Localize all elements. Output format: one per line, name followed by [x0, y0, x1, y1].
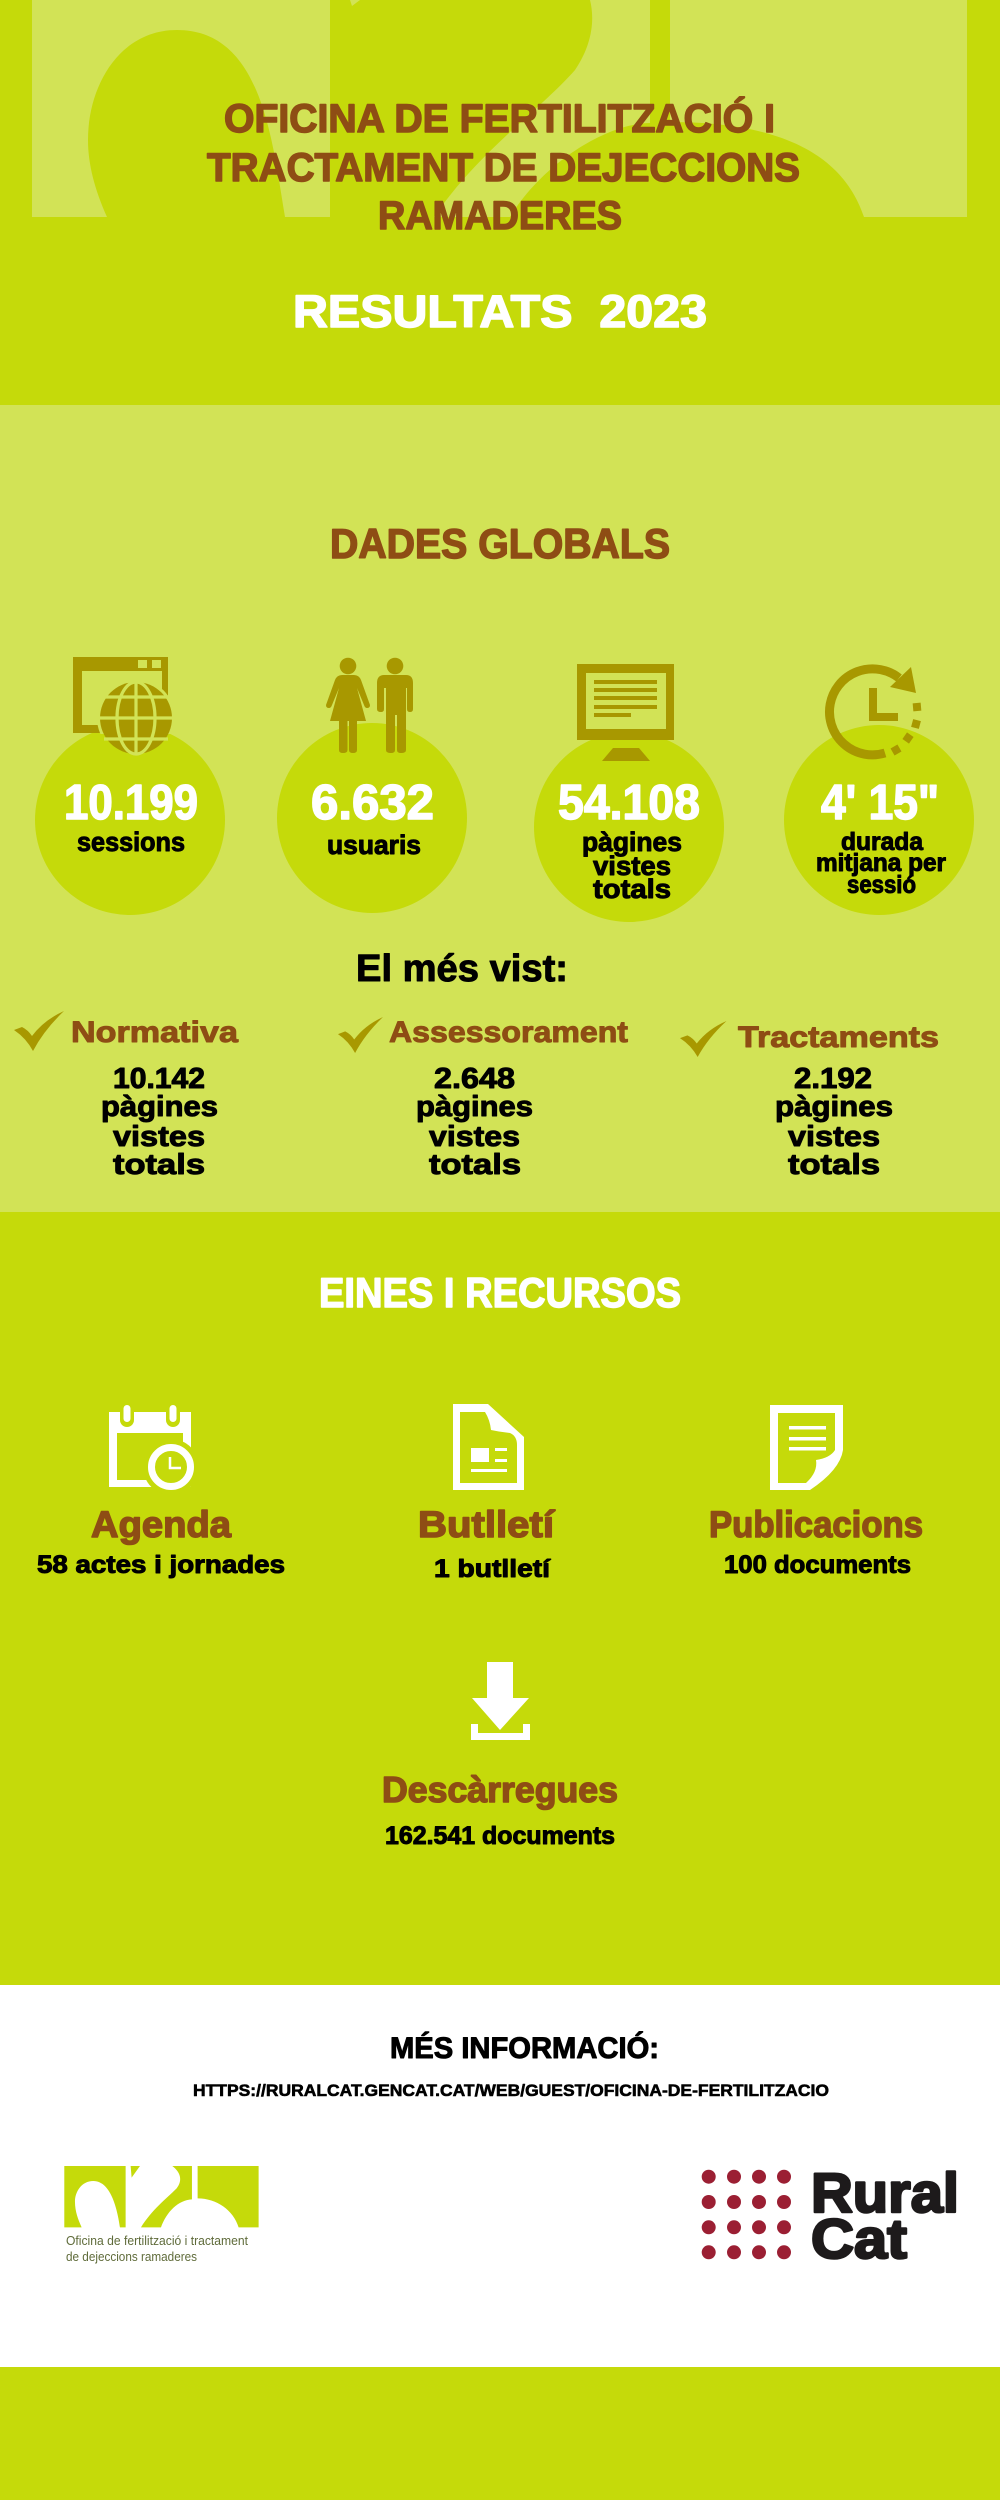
- panel: header: [0, 0, 1000, 405]
- title: OFICINA DE FERTILITZACIÓ I: [224, 95, 775, 141]
- icon: download arrow: [471, 1662, 530, 1740]
- logo: ruralcat: Cat: [811, 2207, 907, 2270]
- subtitle: resultats 2023: RESULTATS 2023: [293, 286, 707, 337]
- panel: dades globals: [0, 405, 1000, 1212]
- watermark logo: [32, 0, 967, 217]
- item: assessorament: vistes: [429, 1121, 520, 1153]
- item: agenda: Agenda: [91, 1504, 231, 1545]
- item: agenda: [37, 1403, 285, 1579]
- heading: mes informacio: MÉS INFORMACIÓ:: [390, 2031, 659, 2065]
- icon: newsletter page: [453, 1404, 524, 1490]
- item: tractaments: 2.192: [794, 1063, 872, 1095]
- stat: sessions: sessions: [77, 827, 185, 857]
- icon: clock with arrow: [829, 667, 921, 755]
- panel: mes informacio: [0, 1985, 1000, 2367]
- stat: pagines vistes: 54.108: [558, 776, 700, 830]
- panel: footer band: [0, 2367, 1000, 2500]
- icon: check: [338, 1017, 383, 1053]
- title: [207, 95, 800, 238]
- item: tractaments: vistes: [788, 1121, 880, 1153]
- item: assessorament: Assessorament: [389, 1016, 628, 1049]
- item: tractaments: totals: [788, 1149, 880, 1181]
- item: normativa: 10.142: [113, 1063, 205, 1095]
- stat: durada mitjana: 4' 15": [821, 776, 939, 830]
- item: agenda: 58 actes i jornades: [37, 1551, 285, 1579]
- item: tractaments: pàgines: [775, 1091, 893, 1123]
- stat: usuaris: [277, 658, 467, 913]
- item: publicacions: 100 documents: [724, 1551, 911, 1579]
- stat: durada mitjana: mitjana per: [816, 849, 946, 877]
- logo: oficina: Oficina de fertilització i tractament: [66, 2233, 248, 2248]
- stat: pagines vistes: totals: [593, 874, 671, 904]
- heading: dades globals: DADES GLOBALS: [330, 520, 670, 567]
- heading: eines i recursos: EINES I RECURSOS: [319, 1269, 681, 1316]
- stat: durada mitjana: durada: [841, 828, 924, 856]
- icon: monitor: [577, 664, 674, 761]
- stat: pagines vistes: pàgines: [582, 827, 682, 857]
- item: assessorament: pàgines: [416, 1091, 533, 1123]
- item: normativa: totals: [113, 1149, 205, 1181]
- item: descarregues: Descàrregues: [382, 1769, 618, 1810]
- item: butlleti: 1 butlletí: [434, 1555, 551, 1583]
- icon: check: [14, 1011, 64, 1051]
- item: normativa: pàgines: [101, 1091, 218, 1123]
- icon: people: [326, 658, 413, 753]
- logo: ruralcat: Rural: [811, 2161, 959, 2224]
- stat: sessions: 10.199: [64, 776, 198, 830]
- item: tractaments: [680, 1021, 939, 1181]
- item: assessorament: totals: [429, 1149, 521, 1181]
- icon: document: [770, 1405, 843, 1490]
- logo: oficina: de dejeccions ramaderes: [66, 2249, 197, 2264]
- item: butlleti: Butlletí: [418, 1504, 556, 1545]
- link url: HTTPS://RURALCAT.GENCAT.CAT/WEB/GUEST/OFICINA-DE-FERTILITZACIO: [193, 2081, 829, 2100]
- title: RAMADERES: [378, 194, 622, 238]
- item: publicacions: Publicacions: [709, 1504, 923, 1545]
- item: publicacions: [709, 1405, 923, 1579]
- item: normativa: [14, 1011, 238, 1181]
- item: tractaments: Tractaments: [738, 1021, 939, 1054]
- item: assessorament: [338, 1016, 628, 1181]
- stat: usuaris: 6.632: [311, 776, 434, 830]
- icon: check: [680, 1021, 726, 1057]
- stat: pagines vistes: [534, 664, 724, 922]
- item: normativa: Normativa: [71, 1016, 238, 1049]
- stat: pagines vistes: vistes: [593, 851, 671, 881]
- stat: durada mitjana: sessió: [847, 871, 916, 899]
- item: butlleti: [418, 1404, 556, 1583]
- stat: usuaris: usuaris: [327, 830, 421, 860]
- item: assessorament: 2.648: [434, 1063, 515, 1095]
- panel: eines i recursos: [0, 1212, 1000, 1985]
- icon: browser globe: [73, 657, 175, 757]
- stat: durada mitjana: [784, 667, 974, 915]
- item: normativa: vistes: [113, 1121, 205, 1153]
- item: descarregues: [382, 1662, 618, 1850]
- heading: el mes vist: El més vist:: [356, 948, 568, 990]
- logo: oficina: [64, 2166, 259, 2264]
- title: TRACTAMENT DE DEJECCIONS: [207, 146, 800, 190]
- logo: ruralcat: [702, 2161, 959, 2270]
- icon: calendar: [109, 1403, 199, 1495]
- stat: sessions: [35, 657, 225, 915]
- item: descarregues: 162.541 documents: [385, 1822, 615, 1850]
